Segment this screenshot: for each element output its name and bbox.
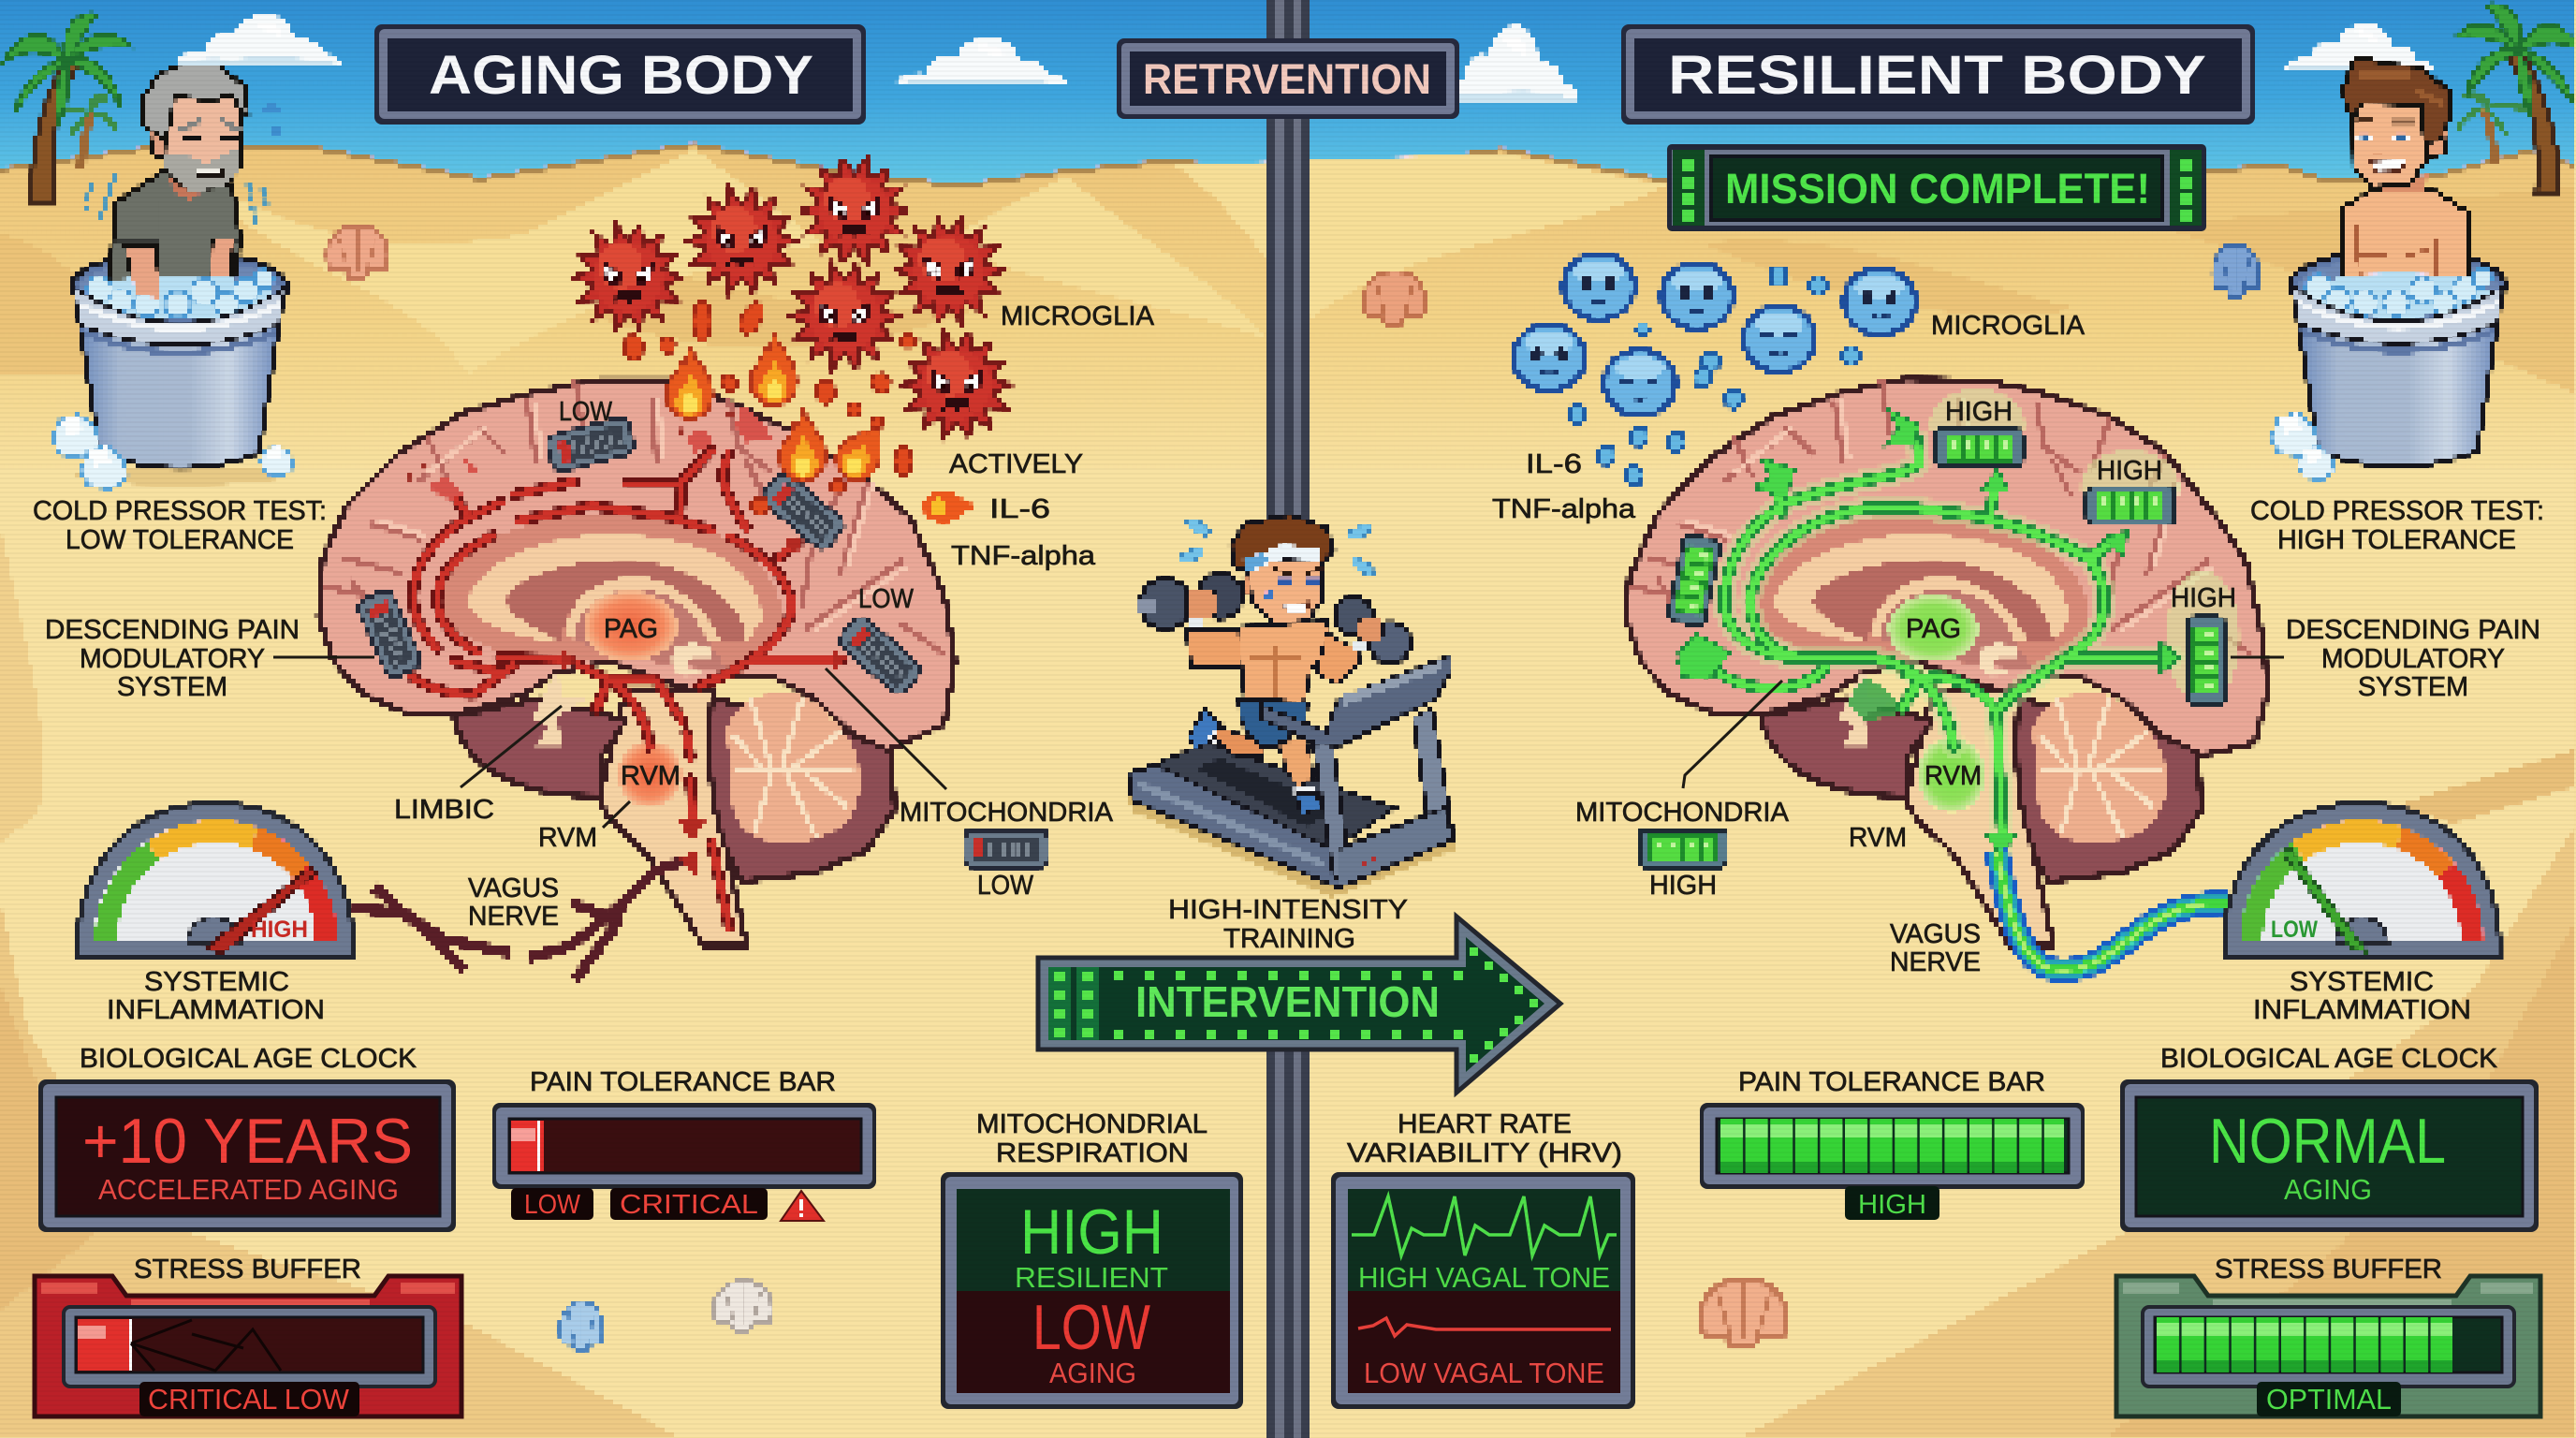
right leader lines (1683, 657, 2284, 788)
label: systemic inflammation right: INFLAMMATION (2253, 995, 2471, 1025)
left vagus nerve (353, 861, 681, 980)
left mitochondria battery (964, 829, 1048, 867)
panel: biological age clock aging: +10 YEARS (82, 1106, 413, 1177)
header: aging body: AGING BODY (429, 45, 813, 106)
right brain: resilient pathways: HIGH (2171, 583, 2236, 613)
center signpost pole (1266, 0, 1310, 1438)
left labels: MITOCHONDRIA (900, 798, 1114, 828)
panel: pain tolerance bar high: PAIN TOLERANCE BAR (1738, 1067, 2045, 1097)
panel: mitochondrial respiration (941, 1109, 1243, 1409)
label: cold pressor test high (2250, 496, 2544, 555)
label: cold pressor test high: HIGH TOLERANCE (2277, 525, 2516, 555)
right gauge: systemic inflammation low (2224, 803, 2499, 958)
left labels: IL-6 (989, 494, 1050, 524)
panel: heart rate variability (1331, 1109, 1635, 1409)
right labels: MODULATORY (2321, 644, 2505, 674)
right labels: DESCENDING PAIN (2286, 615, 2540, 645)
label: cold pressor test high: COLD PRESSOR TEST: (2250, 496, 2544, 526)
right brain: resilient pathways: PAG (1906, 614, 1961, 644)
left gauge: systemic inflammation high: HIGH (251, 917, 308, 943)
panel: pain tolerance bar low (492, 1067, 876, 1221)
left labels: LOW (977, 871, 1034, 901)
right labels: HIGH (1649, 871, 1717, 901)
panel: mitochondrial respiration: RESPIRATION (996, 1138, 1189, 1168)
panel: biological age clock aging: BIOLOGICAL AGE CLOCK (80, 1044, 417, 1074)
panel: mitochondrial respiration: MITOCHONDRIAL (976, 1109, 1208, 1139)
label: cold pressor test low: LOW TOLERANCE (66, 525, 294, 555)
left gauge: systemic inflammation high (78, 803, 353, 958)
panel: pain tolerance bar high (1700, 1067, 2085, 1220)
panel: mitochondrial respiration: HIGH (1020, 1196, 1164, 1268)
left labels: MODULATORY (80, 644, 265, 674)
left labels: NERVE (468, 902, 559, 932)
panel: mitochondrial respiration: LOW (1032, 1292, 1150, 1363)
label: systemic inflammation right (2253, 967, 2471, 1025)
banner: mission complete: MISSION COMPLETE! (1725, 165, 2150, 213)
right labels: IL-6 (1526, 449, 1582, 479)
right mitochondria battery (1639, 829, 1727, 867)
panel: biological age clock normal (2120, 1044, 2539, 1232)
panel: stress buffer critical low (35, 1255, 461, 1416)
label: systemic inflammation left: INFLAMMATION (107, 995, 325, 1025)
panel: biological age clock normal: NORMAL (2209, 1106, 2446, 1177)
left labels: MICROGLIA (1001, 301, 1155, 331)
right brain: resilient pathways: HIGH (2097, 456, 2162, 486)
right labels: VAGUS (1890, 919, 1981, 949)
right labels: NERVE (1890, 947, 1981, 977)
panel: biological age clock aging (38, 1044, 456, 1232)
seashells (327, 226, 2259, 1352)
panel: stress buffer critical low: CRITICAL LOW (148, 1383, 350, 1416)
panel: pain tolerance bar low: CRITICAL (620, 1190, 758, 1220)
panel: biological age clock aging: ACCELERATED AGING (98, 1173, 399, 1206)
left labels: DESCENDING PAIN (45, 615, 300, 645)
left labels: LIMBIC (394, 795, 494, 825)
old man in ice bucket (52, 66, 293, 489)
panel: mitochondrial respiration: AGING (1049, 1357, 1136, 1389)
left brain: aging pathways: LOW (559, 397, 613, 427)
panel: stress buffer critical low: STRESS BUFFER (134, 1255, 361, 1284)
label: high-intensity training: TRAINING (1223, 924, 1355, 954)
left labels: ACTIVELY (949, 449, 1083, 479)
right labels: TNF-alpha (1492, 494, 1636, 524)
banner: mission complete (1667, 144, 2206, 231)
left brain: aging pathways (319, 380, 955, 946)
palm trees (0, 4, 2576, 201)
flames and cytokine particles (624, 299, 977, 522)
header: resilient body: RESILIENT BODY (1668, 45, 2206, 106)
intervention arrow (1038, 917, 1560, 1093)
label: cold pressor test low (33, 496, 327, 555)
label: high-intensity training: HIGH-INTENSITY (1168, 895, 1408, 925)
label: cold pressor test low: COLD PRESSOR TEST: (33, 496, 327, 526)
left labels: VAGUS (468, 873, 559, 903)
label: high-intensity training (1168, 895, 1408, 954)
panel: biological age clock normal: AGING (2284, 1173, 2372, 1206)
panel: stress buffer optimal: STRESS BUFFER (2215, 1255, 2442, 1284)
left leader lines (273, 657, 946, 828)
label: systemic inflammation left: SYSTEMIC (144, 967, 289, 997)
right brain: resilient pathways (1626, 379, 2267, 946)
left labels (45, 301, 1155, 932)
young man in ice bucket (2271, 59, 2506, 480)
right labels (1492, 311, 2540, 977)
left labels: RVM (538, 823, 597, 853)
panel: pain tolerance bar low: LOW (524, 1190, 581, 1220)
left brain: aging pathways: LOW (858, 584, 915, 614)
right gauge: systemic inflammation low: LOW (2271, 917, 2318, 943)
panel: stress buffer optimal: OPTIMAL (2266, 1383, 2392, 1416)
right vagus nerve (1997, 850, 2229, 970)
runner on treadmill (1126, 515, 1457, 897)
panel: mitochondrial respiration: RESILIENT (1015, 1261, 1168, 1294)
panel: heart rate variability: VARIABILITY (HRV) (1347, 1138, 1622, 1168)
panel: pain tolerance bar high: HIGH (1858, 1190, 1926, 1220)
panel: heart rate variability: HEART RATE (1398, 1109, 1572, 1139)
clouds (177, 14, 2434, 102)
label: systemic inflammation left (107, 967, 325, 1025)
calm blue microglia and particles (1514, 254, 1915, 485)
angry red microglia (574, 158, 1011, 437)
header: resilient body (1621, 24, 2255, 125)
left brain: aging pathways: PAG (604, 614, 658, 644)
header: retrvention (1117, 38, 1459, 119)
right labels: SYSTEM (2358, 672, 2468, 702)
right brain: resilient pathways: HIGH (1945, 397, 2012, 427)
left brain: aging pathways: RVM (621, 761, 681, 791)
right brain: resilient pathways: RVM (1925, 761, 1982, 791)
panel: biological age clock normal: BIOLOGICAL AGE CLOCK (2160, 1044, 2498, 1074)
right labels: MITOCHONDRIA (1575, 798, 1790, 828)
header: retrvention: RETRVENTION (1143, 55, 1431, 103)
panel: heart rate variability: LOW VAGAL TONE (1364, 1357, 1604, 1389)
panel: stress buffer optimal (2116, 1255, 2540, 1416)
panel: pain tolerance bar low: PAIN TOLERANCE BAR (530, 1067, 836, 1097)
left labels: TNF-alpha (951, 541, 1096, 571)
panel: heart rate variability: HIGH VAGAL TONE (1358, 1261, 1610, 1294)
intervention arrow: INTERVENTION (1135, 977, 1440, 1026)
header: aging body (374, 24, 866, 125)
left labels: SYSTEM (117, 672, 227, 702)
right labels: RVM (1849, 823, 1907, 853)
label: systemic inflammation right: SYSTEMIC (2290, 967, 2434, 997)
right labels: MICROGLIA (1931, 311, 2086, 341)
